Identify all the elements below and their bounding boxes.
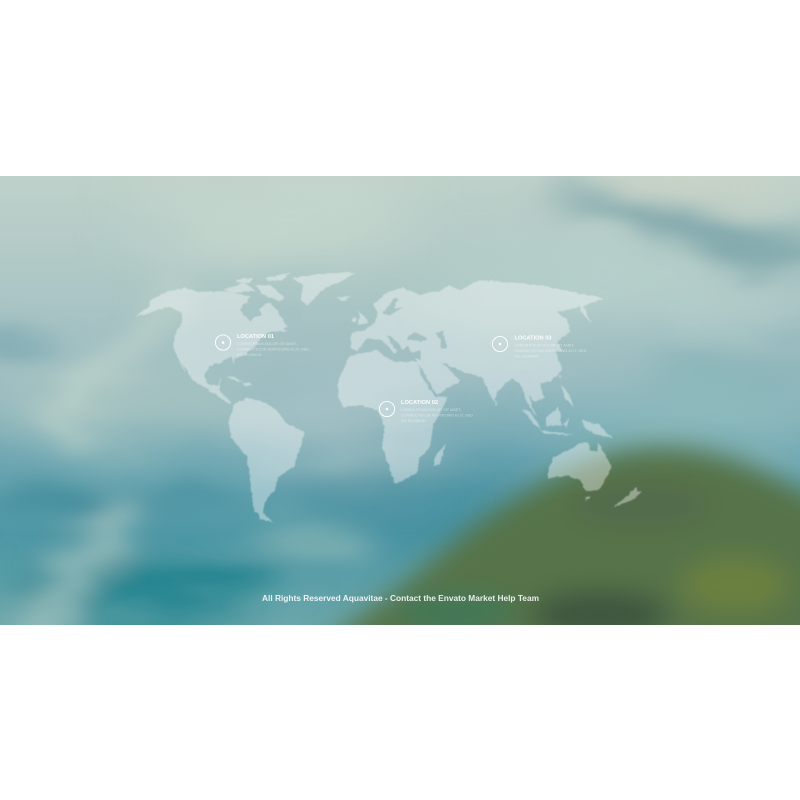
world map — [134, 272, 642, 523]
island: Greenland — [292, 272, 355, 306]
label: location 03: CONSECTETUR ADIPISCING ELIT, SED — [514, 349, 587, 353]
label: location 01: DO EIUSMOD — [237, 353, 262, 357]
island: Madagascar — [434, 443, 446, 467]
label: location 02: LOREM IPSUM DOLOR SIT AMET, — [401, 408, 461, 412]
label: location 01: LOCATION 01 — [237, 334, 274, 340]
label: location 02: DO EIUSMOD — [401, 419, 426, 423]
label: location 03: DO EIUSMOD — [514, 354, 539, 358]
continent: Africa — [337, 350, 448, 484]
label: location 01: LOREM IPSUM DOLOR SIT AMET, — [237, 342, 297, 346]
marker: location 03 — [492, 336, 508, 352]
islands: United Kingdom and Ireland — [352, 310, 368, 325]
island: New Zealand — [613, 487, 642, 507]
continent: North America — [134, 288, 287, 404]
label: location 03: LOCATION 03 — [514, 336, 552, 342]
label: location 01: CONSECTETUR ADIPISCING ELIT, SED — [237, 348, 309, 352]
continent: Australia — [548, 442, 612, 501]
islands: Canadian Arctic — [223, 273, 291, 301]
blurred landscape background — [0, 152, 800, 650]
footer credit: All Rights Reserved Aquavitae - Contact the Envato Market Help Team — [262, 593, 539, 603]
label: location 03 — [514, 336, 587, 358]
continent: South America — [228, 398, 305, 523]
islands: Caribbean — [226, 376, 252, 386]
label: location 02: LOCATION 02 — [401, 400, 438, 406]
label: location 01 — [237, 334, 309, 357]
marker: location 01 — [215, 335, 231, 350]
islands: Southeast Asia — [495, 373, 612, 438]
label: location 03: LOREM IPSUM DOLOR SIT AMET, — [514, 344, 575, 348]
label: location 02: CONSECTETUR ADIPISCING ELIT, SED — [401, 414, 473, 418]
continent: Eurasia — [351, 280, 604, 417]
label: location 02 — [401, 400, 473, 423]
island: Iceland — [337, 296, 350, 301]
marker: location 02 — [379, 401, 395, 417]
